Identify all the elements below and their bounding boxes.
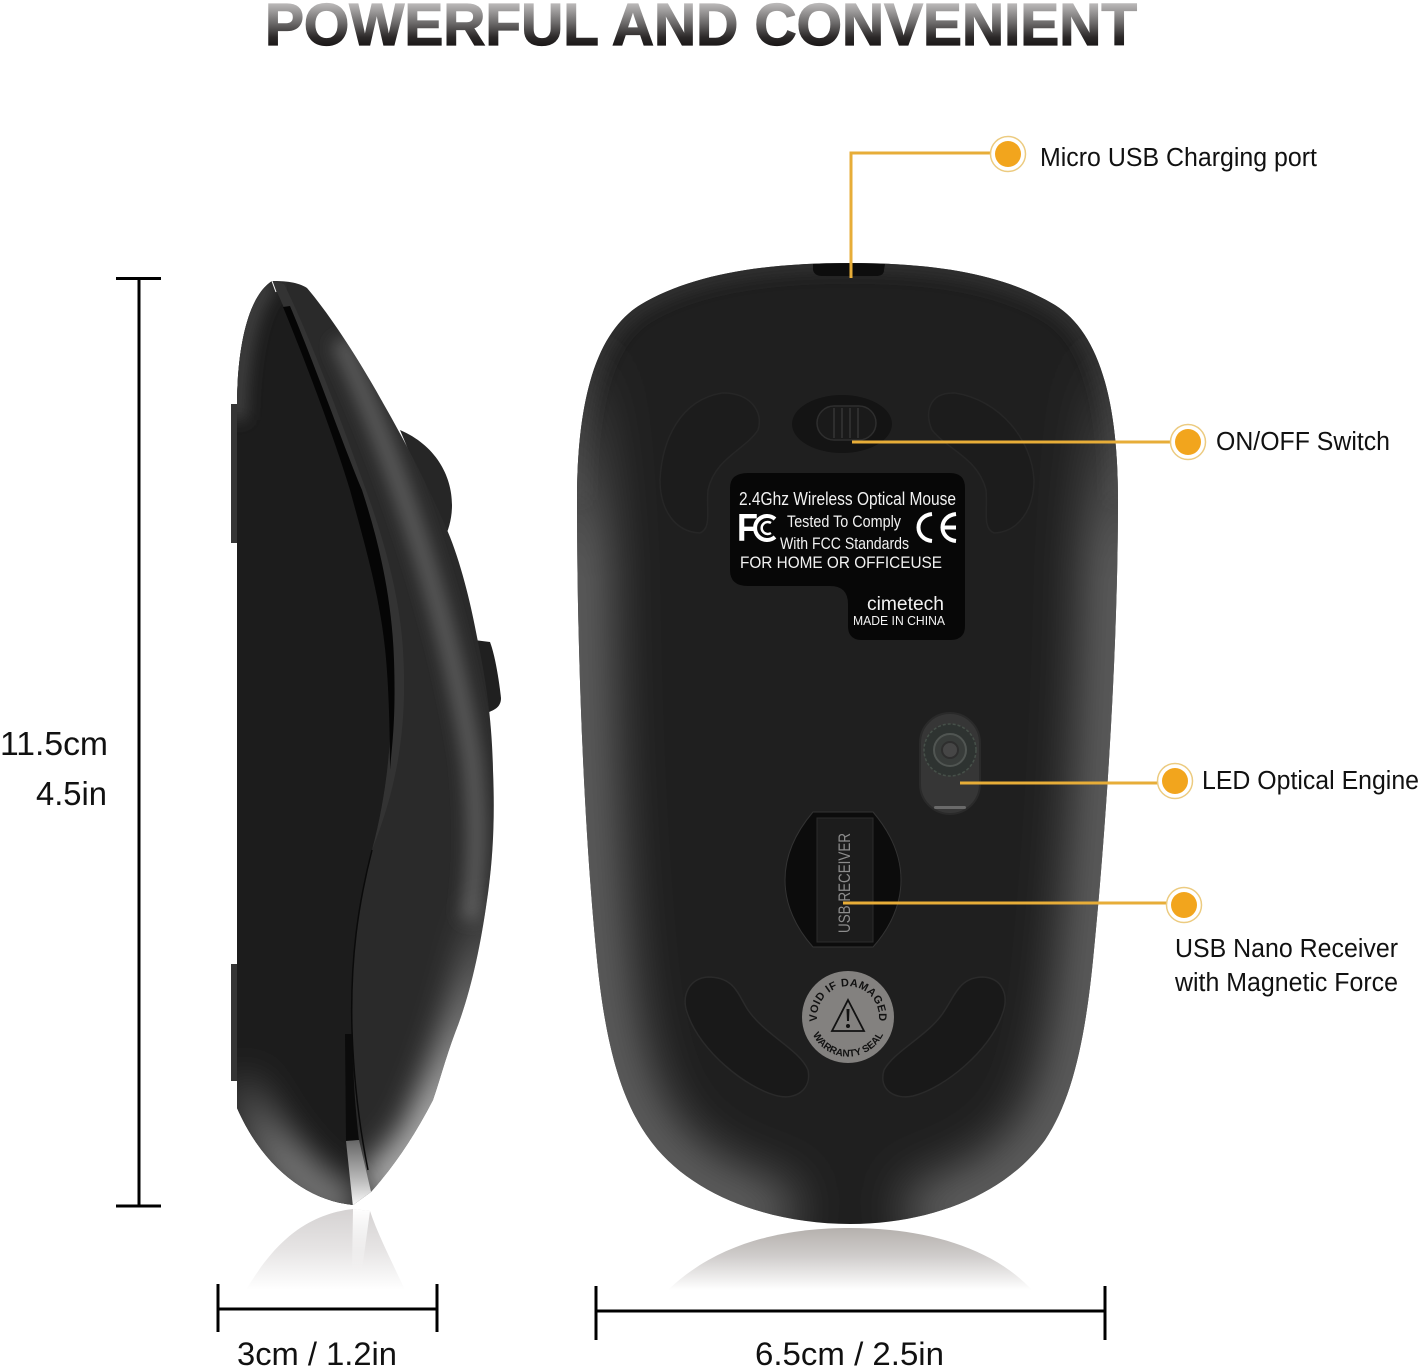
seam line [352, 850, 372, 1170]
left edge light [577, 340, 790, 1218]
usb receiver text: USB RECEIVER [835, 833, 854, 933]
callout: micro usb [851, 136, 1317, 278]
callout: usb nano receiver: with Magnetic Force [1174, 969, 1398, 997]
mouse body [230, 275, 500, 1215]
lower shell glow [237, 1070, 353, 1205]
dimension: height: 4.5in [36, 775, 107, 812]
lower body shell [230, 281, 391, 1205]
callout: micro usb: Micro USB Charging port [1040, 144, 1317, 172]
right edge light [910, 340, 1118, 1218]
soft rim [577, 263, 1118, 500]
black slit [283, 306, 395, 770]
foot pad top left [660, 393, 759, 533]
warranty seal [802, 971, 894, 1063]
FCC logo: F [737, 507, 758, 550]
label text: FOR HOME OR OFFICEUSE [740, 553, 942, 572]
label text: cimetech [867, 594, 944, 615]
lower edge glow [360, 910, 486, 1192]
led optical engine [920, 713, 980, 814]
scroll wheel [400, 430, 452, 538]
callout: on/off switch: ON/OFF Switch [1216, 428, 1390, 456]
foot pad bottom left [685, 977, 809, 1097]
usb receiver slot [785, 812, 901, 947]
label text: Tested To Comply [787, 512, 901, 531]
dimension: height: 11.5cm [0, 725, 108, 762]
side thumb button [474, 640, 501, 713]
body highlight [340, 340, 476, 920]
warranty seal: WARRANTY SEAL [814, 1031, 884, 1057]
label text [739, 489, 956, 628]
dimension: height [0, 278, 161, 1206]
callout: led optical engine: LED Optical Engine [1202, 767, 1419, 795]
label text: MADE IN CHINA [853, 614, 946, 628]
side view reflection [246, 1209, 405, 1290]
product label [730, 473, 965, 640]
mouse body [570, 255, 1130, 1235]
callout: on/off switch [852, 424, 1390, 460]
bottom view mouse [577, 263, 1118, 1224]
top tip glint [272, 281, 276, 292]
callout: usb nano receiver [843, 888, 1398, 997]
light flare [346, 1140, 372, 1207]
bottom view reflection [668, 1228, 1032, 1290]
micro usb port [813, 263, 885, 276]
callout: usb nano receiver: USB Nano Receiver [1175, 935, 1398, 963]
dimension: bottom width [596, 1286, 1105, 1369]
callout: led optical engine [960, 764, 1419, 798]
foot pad bottom right [883, 977, 1005, 1097]
seam strip [272, 281, 404, 850]
lower black slot [345, 1034, 359, 1141]
on/off switch [792, 395, 892, 453]
label text: With FCC Standards [780, 534, 909, 553]
dimension: side width [218, 1284, 437, 1369]
foot pad top right [929, 393, 1034, 533]
warranty seal: VOID IF DAMAGED [809, 978, 887, 1022]
side view mouse [230, 275, 501, 1215]
CE mark [918, 514, 956, 541]
side buttons on left edge [231, 404, 239, 1081]
upper shell sheen [237, 281, 272, 420]
FCC logo [737, 507, 775, 550]
label text: 2.4Ghz Wireless Optical Mouse [739, 489, 956, 509]
